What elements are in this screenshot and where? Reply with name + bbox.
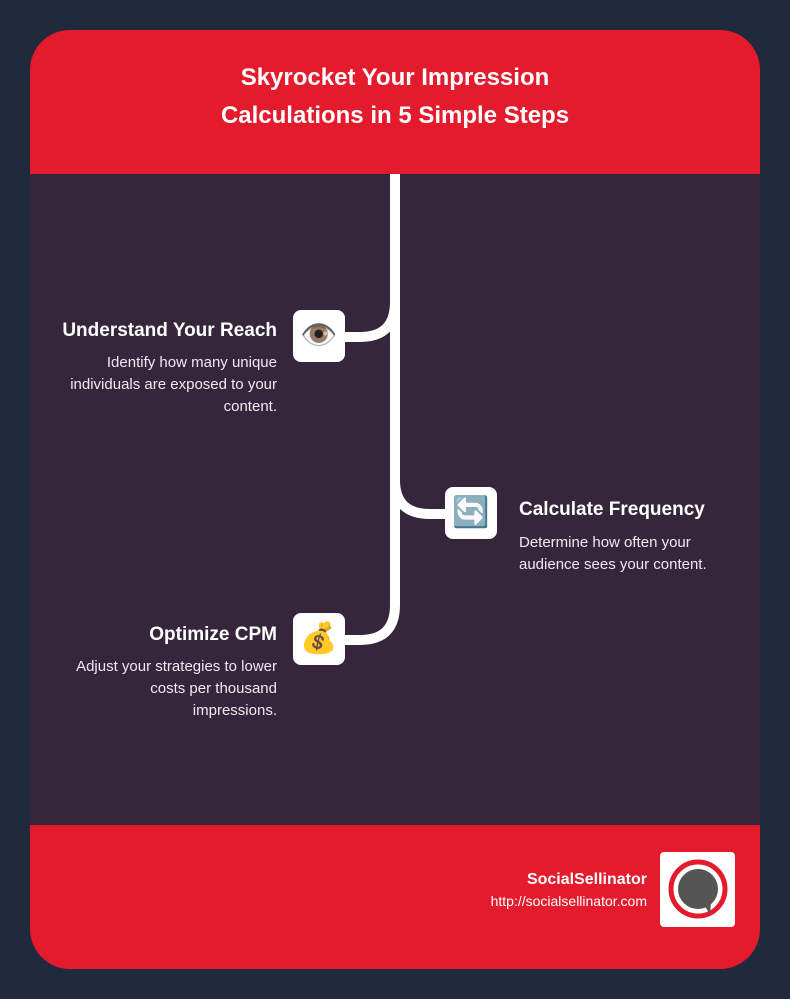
icon: money bag: 💰 bbox=[300, 621, 338, 656]
step 3 text: Adjust your strategies to lower bbox=[76, 658, 277, 675]
step 1 text: individuals are exposed to your bbox=[70, 376, 277, 393]
step 3 text: costs per thousand bbox=[150, 680, 277, 697]
step 2 text: Determine how often your bbox=[519, 534, 691, 551]
step 1 text bbox=[70, 354, 277, 415]
step 3 text: impressions. bbox=[193, 702, 277, 719]
footer brand text: http://socialsellinator.com bbox=[491, 893, 647, 909]
step 1 text: Identify how many unique bbox=[107, 354, 277, 371]
header title bbox=[30, 30, 760, 174]
header title: Calculations in 5 Simple Steps bbox=[221, 102, 569, 129]
step 2 text bbox=[519, 534, 707, 573]
icon: refresh: 🔄 bbox=[452, 495, 490, 530]
footer brand text: SocialSellinator bbox=[527, 871, 647, 888]
step 1 text: content. bbox=[224, 398, 277, 415]
step 3 title: Optimize CPM bbox=[149, 624, 277, 645]
logo bbox=[660, 852, 735, 927]
footer bbox=[30, 825, 760, 969]
icon: eye bbox=[293, 310, 345, 362]
step 1 title: Understand Your Reach bbox=[62, 320, 277, 341]
icon: money bag bbox=[293, 613, 345, 665]
step 2 text: audience sees your content. bbox=[519, 556, 707, 573]
step 3 text bbox=[76, 658, 277, 719]
step 2 title: Calculate Frequency bbox=[519, 499, 705, 520]
footer brand text bbox=[491, 871, 647, 909]
icon: eye: 👁️ bbox=[300, 318, 338, 353]
icon: refresh bbox=[445, 487, 497, 539]
header title: Skyrocket Your Impression bbox=[241, 64, 549, 91]
